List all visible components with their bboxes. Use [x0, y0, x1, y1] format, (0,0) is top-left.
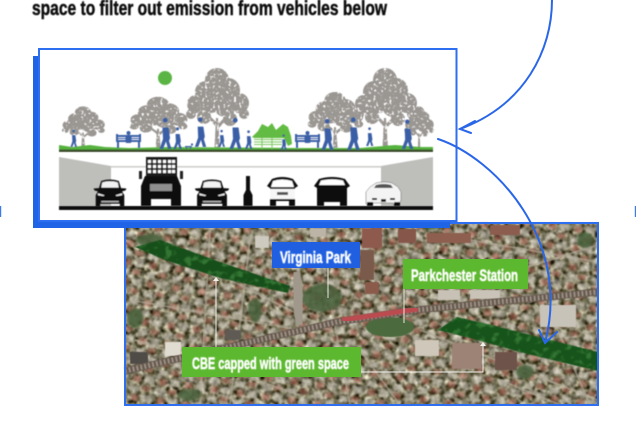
bollard [244, 176, 252, 206]
roundabout park [366, 317, 414, 337]
house grid [125, 223, 598, 405]
leader arrows: CBE capped [213, 277, 486, 372]
photo base texture [125, 223, 598, 405]
car [195, 180, 229, 207]
side tick: right [635, 206, 636, 217]
main road [294, 272, 302, 325]
panel: aerial photo of the capped expressway [125, 220, 598, 405]
label: CBE capped with green space [182, 347, 361, 377]
white sports car [366, 182, 401, 206]
label: Virginia Park: Virginia Park [280, 248, 351, 267]
sun [158, 71, 172, 85]
leader: Parkchester Station [403, 289, 405, 323]
black pickup [314, 177, 350, 206]
photo border [125, 223, 598, 405]
elevated railway [125, 292, 598, 371]
station platform [342, 309, 418, 320]
green cap: east section [438, 317, 598, 371]
green cap: west section [135, 240, 290, 293]
tunnel walls and ceiling [59, 157, 433, 206]
white pickup [267, 177, 298, 206]
label: Virginia Park [272, 242, 360, 268]
grass deck [59, 145, 433, 152]
road [59, 206, 433, 210]
car [94, 180, 126, 207]
panel shadow [33, 56, 450, 228]
trees [62, 68, 434, 148]
arrow: section panel to aerial photo [438, 139, 557, 343]
people and benches [70, 117, 413, 150]
vehicles [94, 157, 401, 207]
label: Parkchester Station [403, 259, 528, 289]
panel: street section [33, 49, 456, 228]
truck [139, 157, 183, 206]
city blocks [130, 225, 598, 405]
panel frame [39, 49, 456, 221]
label: CBE capped with green space: CBE capped with green space [192, 354, 349, 373]
label: Parkchester Station: Parkchester Station [411, 266, 518, 285]
tree canopy patches [127, 220, 593, 401]
leader: Virginia Park [327, 268, 329, 298]
arrow: heading to section panel [460, 0, 552, 133]
playground sculpture [252, 123, 292, 149]
side tick: left [0, 206, 1, 217]
